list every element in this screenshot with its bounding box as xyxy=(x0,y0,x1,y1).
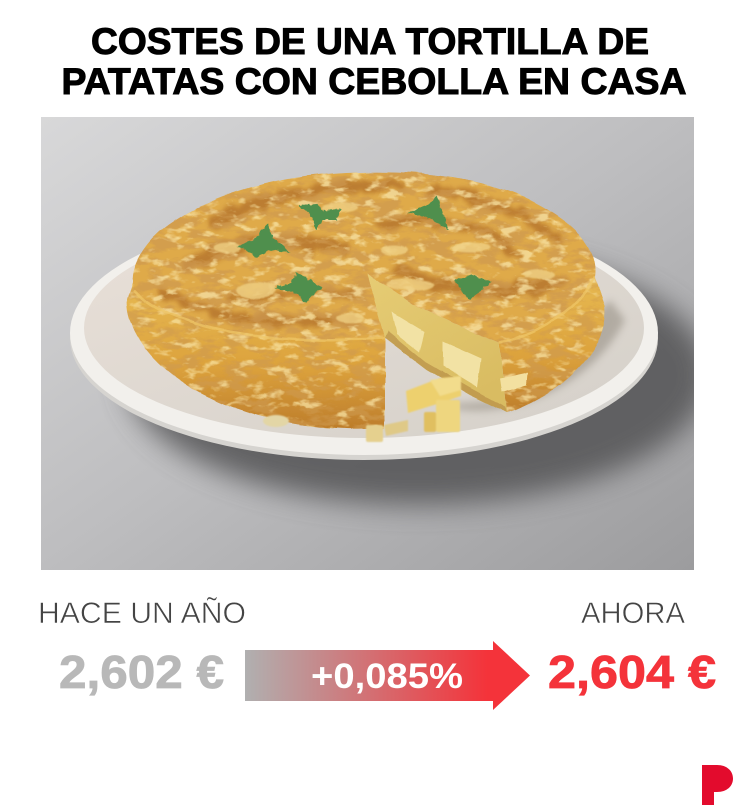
arrow: price increase: +0,085% xyxy=(311,657,463,696)
outer side wall xyxy=(127,273,385,429)
plate shadow xyxy=(126,245,710,505)
title: PATATAS CON CEBOLLA EN CASA xyxy=(62,61,686,102)
label: ahora: AHORA xyxy=(581,597,685,630)
title xyxy=(62,21,686,102)
tortilla shadow on plate xyxy=(440,300,625,411)
tortilla slice xyxy=(120,165,610,435)
plate xyxy=(70,254,658,460)
arrow: price increase xyxy=(245,641,530,710)
value: current price: 2,604 € xyxy=(548,646,716,698)
icon: potato cubes xyxy=(263,376,461,442)
photo: tortilla de patatas on a plate xyxy=(41,117,710,570)
value: previous price: 2,602 € xyxy=(59,646,224,698)
cut face xyxy=(367,273,507,413)
icon: parsley leaves xyxy=(237,196,491,303)
rim line xyxy=(133,278,595,343)
icon: publisher logo xyxy=(702,765,733,805)
label: hace un año: HACE UN AÑO xyxy=(38,596,246,630)
top surface xyxy=(132,172,596,343)
title: COSTES DE UNA TORTILLA DE xyxy=(91,21,649,62)
